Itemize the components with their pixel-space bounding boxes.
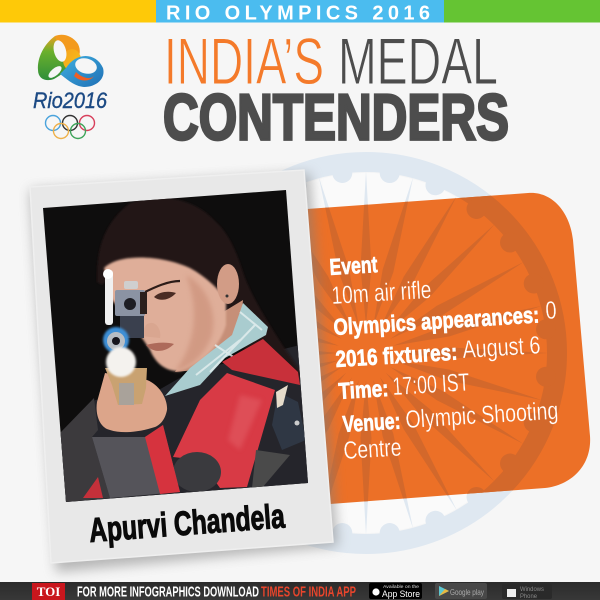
- TOI badge: TOI: [37, 584, 60, 599]
- text: Rio2016 wordmark: Rio2016: [33, 88, 108, 113]
- text: event: August 6: [462, 331, 541, 364]
- neck: [175, 300, 243, 372]
- google play badge: Google play: [450, 587, 485, 597]
- top colour band: [0, 0, 600, 24]
- face: [104, 257, 226, 371]
- text: download prompt: TIMES OF INDIA APP: [261, 584, 356, 600]
- title: MEDAL: [338, 24, 498, 98]
- windows phone badge: [502, 584, 552, 600]
- rifle sight: [105, 270, 113, 325]
- text: athlete name: Apurvi Chandela: [88, 497, 287, 550]
- text: event: 0: [545, 296, 557, 325]
- top colour band: RIO OLYMPICS 2016: [166, 2, 430, 24]
- nose and lips: [144, 323, 160, 338]
- text: event: Olympics appearances:: [333, 301, 540, 340]
- text: event: Venue:: [342, 407, 401, 437]
- strap: [252, 450, 290, 488]
- hand: [97, 373, 167, 432]
- hair: [97, 198, 305, 378]
- eye and brow: [143, 281, 180, 293]
- ear: [217, 264, 239, 304]
- text: event: Olympic Shooting: [405, 397, 559, 434]
- icon: Olympic rings: [46, 116, 94, 138]
- checked collar: [165, 303, 268, 396]
- app store badge: [369, 583, 422, 600]
- text: event: Event: [329, 251, 378, 280]
- icon: Rio 2016 logo: [33, 35, 108, 138]
- glove: [173, 452, 221, 492]
- red sleeve stripe: [145, 425, 180, 494]
- app store badge: Available on the: [383, 584, 420, 589]
- text: event: 10m air rifle: [331, 276, 432, 310]
- dark jacket: [60, 345, 320, 510]
- windows phone badge: Windows: [520, 587, 544, 593]
- rifle grip: [105, 368, 147, 405]
- photo: Apurvi Chandela aiming rifle: [43, 190, 308, 502]
- sleeve: [60, 398, 110, 502]
- red jacket panels: [222, 339, 300, 385]
- text: event: Time:: [338, 375, 389, 404]
- holster: [272, 392, 306, 450]
- panel: polaroid photo frame: [30, 170, 338, 572]
- icon: Ashoka chakra background wheel: [174, 161, 558, 545]
- title: [163, 24, 509, 154]
- text: event: [329, 251, 559, 465]
- text: event: 17:00 IST: [392, 368, 470, 401]
- panel: orange details card: [308, 192, 590, 504]
- windows phone badge: Phone: [520, 594, 538, 600]
- title: INDIA’S: [164, 24, 324, 98]
- app store badge: App Store: [382, 589, 420, 600]
- text: download prompt: FOR MORE INFOGRAPHICS DOWNLOAD: [77, 584, 259, 600]
- text: event: Centre: [343, 434, 402, 465]
- google play badge: [435, 583, 487, 599]
- footer bar: [0, 582, 600, 600]
- text: event: 2016 fixtures:: [335, 339, 458, 372]
- TOI badge: [32, 583, 65, 600]
